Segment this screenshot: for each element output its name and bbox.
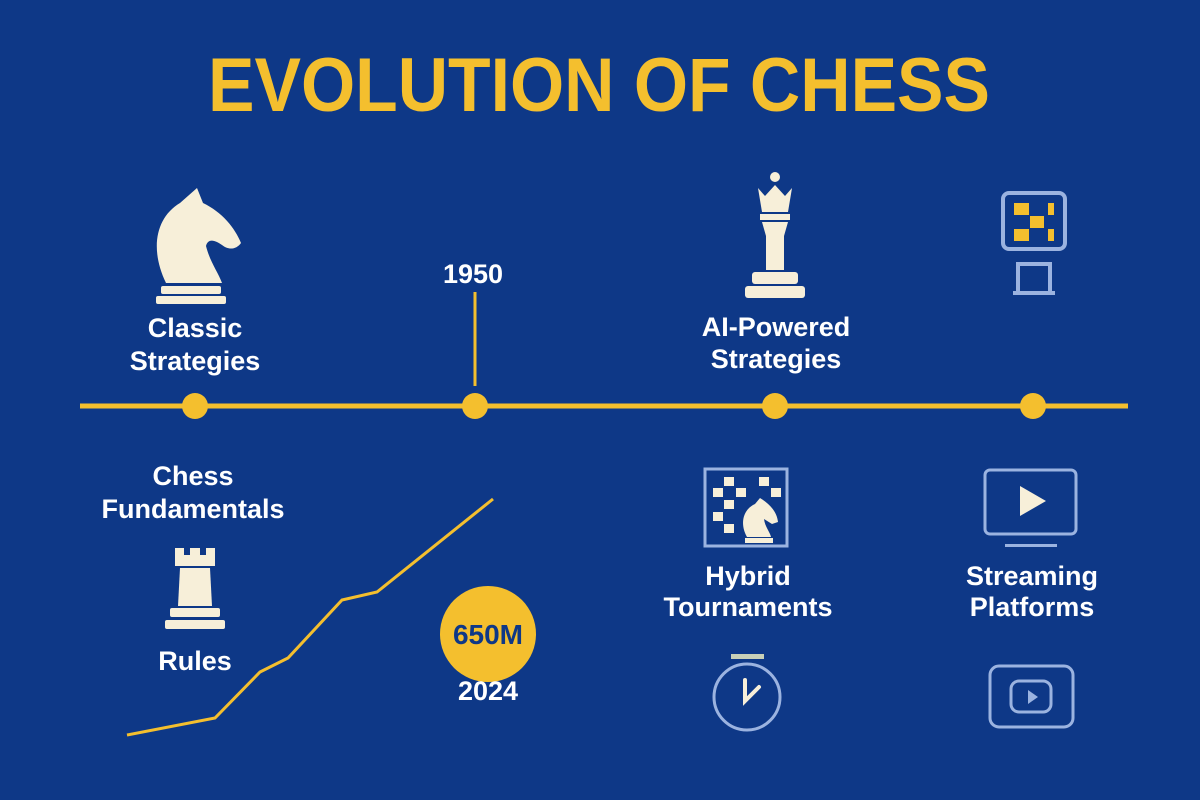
label: Hybrid Tournaments: Tournaments xyxy=(663,592,833,622)
label: Streaming Platforms: Streaming xyxy=(966,561,1098,591)
icon: board on stand xyxy=(1003,193,1065,295)
label: Chess Fundamentals: Fundamentals xyxy=(101,494,285,524)
icon: hybrid board xyxy=(705,469,787,546)
icon: queen xyxy=(745,172,805,298)
label: Classic Strategies: Strategies xyxy=(130,346,260,376)
year label: 1950: 1950 xyxy=(443,259,503,289)
stat: 650M: 650M xyxy=(453,619,523,650)
label: Streaming Platforms: Platforms xyxy=(970,592,1094,622)
timeline xyxy=(80,292,1128,419)
icon: knight xyxy=(156,188,241,304)
label: 2024: 2024 xyxy=(458,676,518,706)
icon: stopwatch xyxy=(714,654,780,730)
label: AI-Powered Strategies: Strategies xyxy=(711,344,841,374)
label: AI-Powered Strategies: AI-Powered xyxy=(702,312,850,342)
label: Chess Fundamentals: Chess xyxy=(152,461,234,491)
icon: rook xyxy=(165,548,225,629)
label: Hybrid Tournaments: Hybrid xyxy=(705,561,791,591)
icon: monitor play xyxy=(985,470,1076,547)
label: Classic Strategies: Classic xyxy=(148,313,242,343)
icon: video play xyxy=(990,666,1073,727)
title: EVOLUTION OF CHESS xyxy=(208,43,990,128)
stat: 650M xyxy=(440,586,536,682)
label: Rules: Rules xyxy=(158,646,232,676)
line chart: growth xyxy=(127,499,493,735)
